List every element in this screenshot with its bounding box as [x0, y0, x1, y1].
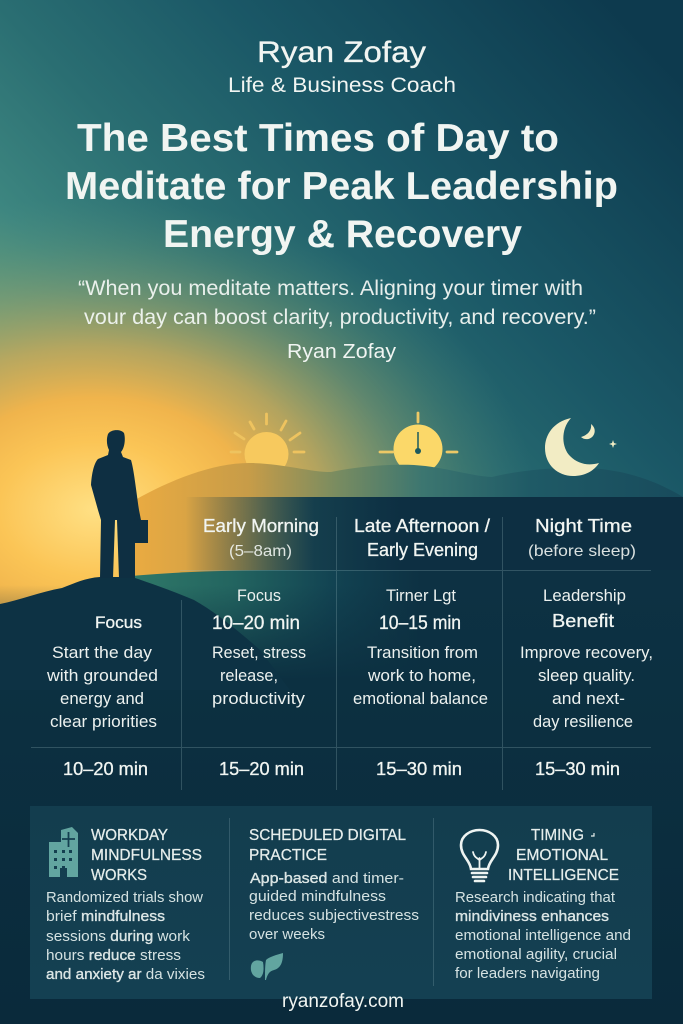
row: night time column: Leadership — [543, 587, 626, 605]
card: scheduled digital practice: PRACTICE — [249, 847, 327, 864]
row: early morning column — [212, 587, 306, 708]
card: scheduled digital practice — [249, 827, 419, 943]
column header: early morning — [203, 516, 319, 560]
row: focus column: energy and — [60, 690, 144, 708]
title — [65, 117, 618, 256]
row: late afternoon column: emotional balance — [353, 690, 488, 708]
row: session durations: 15–30 min — [535, 759, 620, 779]
card: workday mindfulness: WORKS — [91, 867, 147, 884]
title: The Best Times of Day to — [77, 117, 559, 160]
card: workday mindfulness: sessions during work — [46, 929, 191, 945]
row: focus column — [46, 613, 158, 731]
row: session durations: 15–30 min — [376, 759, 462, 779]
icon: crescent moon and stars — [545, 418, 617, 476]
quote: “When you meditate matters. Aligning your timer with — [78, 277, 583, 300]
quote: Ryan Zofay — [287, 341, 396, 363]
card: workday mindfulness: MINDFULNESS — [91, 847, 202, 864]
row: session durations: 10–20 min — [63, 759, 148, 779]
card: timing and emotional intelligence: emotional intelligence and — [455, 928, 631, 944]
website footer: ryanzofay.com — [282, 991, 404, 1012]
card: timing and emotional intelligence: Research indicating that — [455, 890, 615, 906]
card: timing and emotional intelligence: INTELLIGENCE — [508, 867, 619, 884]
title: Energy & Recovery — [163, 213, 522, 256]
row: late afternoon column: Transition from — [367, 644, 478, 662]
row: focus column: Focus — [95, 613, 142, 632]
table grid lines — [31, 517, 651, 790]
quote — [78, 277, 596, 363]
column header: late afternoon — [354, 516, 490, 560]
icon: light bulb — [461, 830, 498, 881]
row: early morning column: 10–20 min — [212, 613, 300, 634]
row: late afternoon column — [353, 587, 488, 708]
column header: early morning: (5–8am) — [229, 543, 292, 560]
title: Meditate for Peak Leadership — [65, 165, 618, 208]
row: late afternoon column: Tirner Lgt — [386, 587, 456, 605]
card: workday mindfulness — [46, 827, 205, 983]
card: timing and emotional intelligence: EMOTIONAL — [516, 847, 608, 864]
quote: vour day can boost clarity, productivity, and recovery.” — [84, 306, 596, 329]
card: timing and emotional intelligence: TIMING — [531, 827, 584, 844]
row: night time column: day resilience — [533, 713, 633, 731]
row: focus column: clear priorities — [50, 713, 157, 731]
row: focus column: with grounded — [46, 667, 158, 685]
lower dark ground — [0, 570, 683, 1024]
row: session durations: 15–20 min — [219, 759, 304, 779]
card: scheduled digital practice: reduces subjectivestress — [249, 908, 419, 924]
header — [228, 36, 456, 97]
card: scheduled digital practice: SCHEDULED DIGITAL — [249, 827, 406, 844]
row: early morning column: Reset, stress — [212, 644, 306, 662]
card: timing and emotional intelligence: emotional agility, crucial — [455, 947, 617, 963]
panel: research findings — [30, 806, 652, 999]
column header: early morning: Early Morning — [203, 516, 319, 536]
column header: late afternoon: Early Evening — [367, 540, 478, 560]
column header: night time — [528, 516, 636, 560]
card: workday mindfulness: hours reduce stress — [46, 948, 181, 964]
foreground hill — [0, 577, 290, 690]
row: session durations — [63, 759, 620, 779]
distant hills — [135, 463, 683, 580]
coach role: Life & Business Coach — [228, 74, 456, 97]
icon: sun rising — [231, 414, 304, 476]
row: early morning column: release, — [220, 667, 278, 685]
row: night time column: and next- — [552, 690, 625, 708]
card: timing and emotional intelligence: mindiviness enhances — [455, 909, 609, 925]
column header: night time: (before sleep) — [528, 543, 636, 560]
card: scheduled digital practice: guided mindfulness — [249, 889, 386, 905]
row: early morning column: productivity — [212, 690, 306, 708]
column header: night time: Night Time — [535, 516, 632, 536]
card: timing and emotional intelligence: for leaders navigating — [455, 966, 600, 982]
icon: leaf sprout — [251, 953, 283, 980]
row: night time column: Improve recovery, — [520, 644, 653, 662]
card: timing and emotional intelligence — [455, 827, 631, 982]
row: focus column: Start the day — [52, 644, 153, 662]
silhouette: standing leader with briefcase — [91, 430, 148, 578]
row: late afternoon column: work to home, — [367, 667, 476, 685]
row: night time column: Benefit — [552, 611, 614, 631]
row: night time column — [520, 587, 653, 731]
row: night time column: sleep quality. — [538, 667, 635, 685]
coach name: Ryan Zofay — [257, 36, 426, 69]
row: late afternoon column: 10–15 min — [379, 613, 461, 634]
column header: late afternoon: Late Afternoon / — [354, 516, 490, 536]
card: scheduled digital practice: App-based and timer- — [250, 871, 404, 887]
card: workday mindfulness: WORKDAY — [91, 827, 168, 844]
row: early morning column: Focus — [237, 587, 281, 605]
card: workday mindfulness: and anxiety ar da vixies — [46, 967, 205, 983]
icon: clock sun — [380, 413, 457, 474]
icon: office building — [49, 827, 78, 877]
card: workday mindfulness: brief mindfulness — [46, 909, 165, 925]
table backing panel — [185, 497, 683, 577]
card: scheduled digital practice: over weeks — [249, 927, 325, 943]
card: workday mindfulness: Randomized trials show — [46, 890, 204, 906]
